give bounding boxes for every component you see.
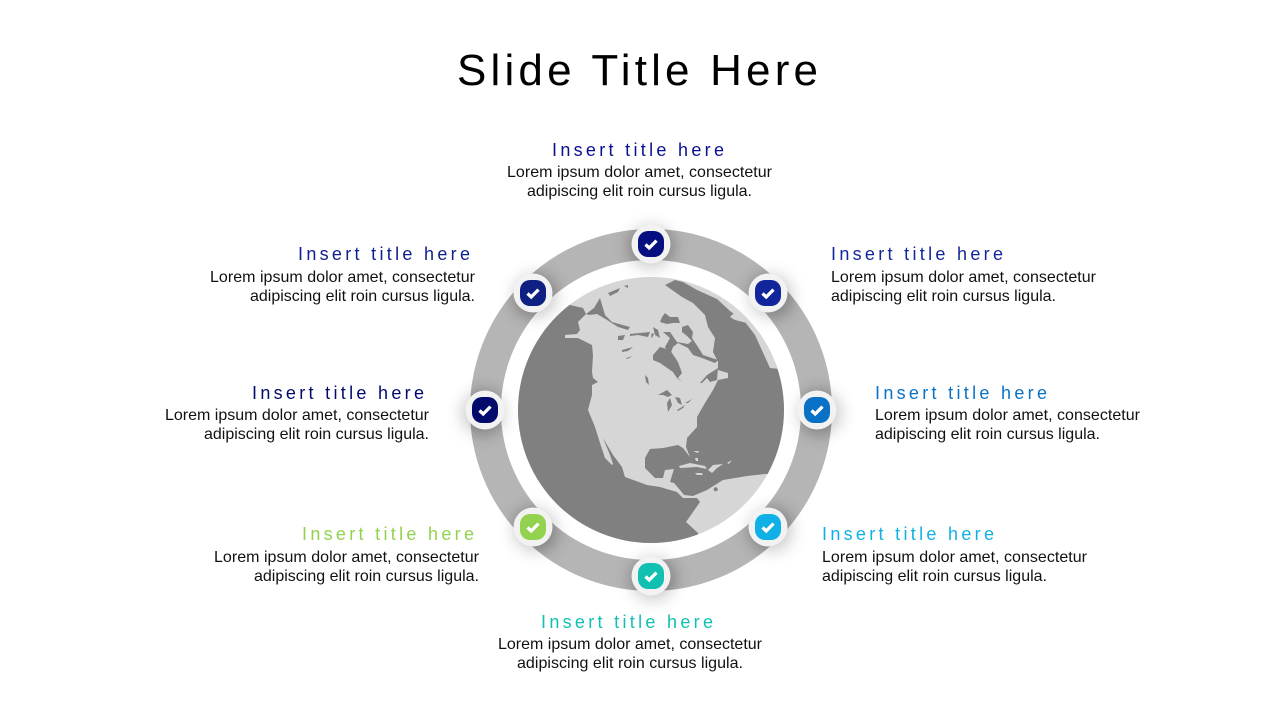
text block: upper left: Lorem ipsum dolor amet, consectetur [210, 269, 476, 286]
node: upper right [748, 274, 788, 312]
node: lower left [514, 508, 552, 546]
text block: lower left: adipiscing elit roin cursus ligula. [254, 568, 479, 585]
text block: lower right [822, 524, 1088, 585]
text block: top: Lorem ipsum dolor amet, consectetur [507, 164, 773, 181]
ring diagram [450, 224, 842, 601]
text block: lower left [214, 524, 480, 585]
text block: bottom: Insert title here [541, 612, 713, 632]
oceans [518, 280, 784, 543]
islands [679, 314, 778, 475]
text block: upper right: adipiscing elit roin cursus ligula. [831, 288, 1056, 305]
text block: upper left: Insert title here [298, 244, 470, 264]
text block: left: Insert title here [252, 383, 424, 403]
title: Slide Title Here [457, 46, 818, 95]
globe [518, 277, 784, 543]
text block: right [875, 383, 1141, 443]
text block: top: Insert title here [552, 140, 724, 160]
white inner ring [501, 260, 801, 560]
node: top [632, 224, 670, 264]
text block: bottom: Lorem ipsum dolor amet, consectetur [498, 636, 763, 653]
text block: upper right: Insert title here [831, 244, 1003, 264]
text block: bottom: adipiscing elit roin cursus ligula. [517, 655, 743, 672]
text block: right: Lorem ipsum dolor amet, consectetur [875, 407, 1141, 424]
text block: left: Lorem ipsum dolor amet, consectetur [165, 407, 430, 424]
text block: lower left: Lorem ipsum dolor amet, consectetur [214, 549, 480, 566]
text block: upper left: adipiscing elit roin cursus ligula. [250, 288, 475, 305]
text block: lower right: Insert title here [822, 524, 994, 544]
text block: lower right: Lorem ipsum dolor amet, consectetur [822, 549, 1088, 566]
node: bottom [632, 556, 670, 596]
text block: left: adipiscing elit roin cursus ligula. [204, 426, 429, 443]
text block: upper right [831, 244, 1097, 305]
ring shading [460, 224, 842, 601]
text block: right: adipiscing elit roin cursus ligula. [875, 426, 1100, 443]
lake [714, 487, 718, 491]
node: left [466, 390, 504, 430]
text block: upper left [210, 244, 476, 305]
text block: lower right: adipiscing elit roin cursus ligula. [822, 568, 1047, 585]
text block: bottom [498, 612, 763, 672]
node: upper left [514, 274, 552, 312]
node shadows [462, 226, 841, 600]
text block: right: Insert title here [875, 383, 1047, 403]
text block: upper right: Lorem ipsum dolor amet, consectetur [831, 269, 1097, 286]
map: North America [518, 280, 784, 543]
grey ring [486, 244, 816, 576]
text block: lower left: Insert title here [302, 524, 474, 544]
text block: top [507, 140, 773, 200]
text block: top: adipiscing elit roin cursus ligula. [527, 183, 752, 200]
node: lower right [748, 508, 788, 546]
text block: left [165, 383, 430, 443]
node: right [798, 390, 836, 430]
